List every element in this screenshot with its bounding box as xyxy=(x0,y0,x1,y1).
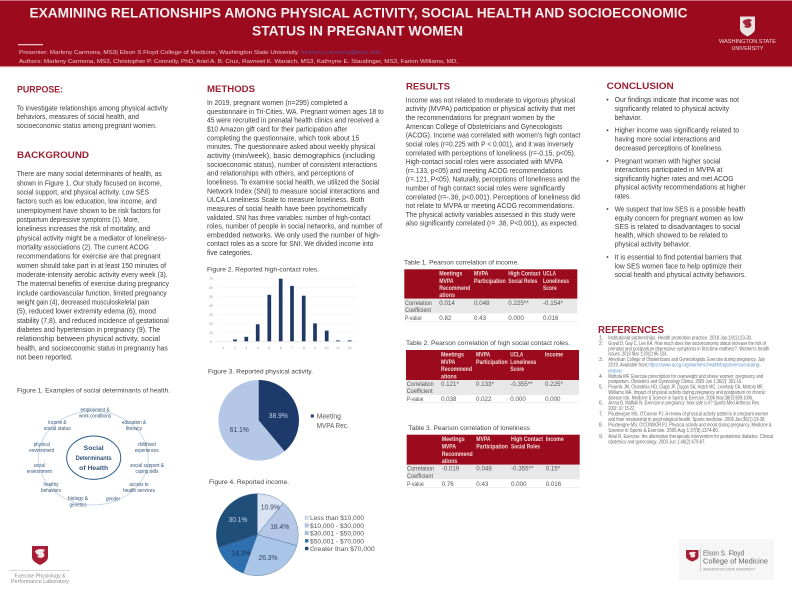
table 1: income: Correlation xyxy=(405,300,432,307)
heading: methods: METHODS xyxy=(207,84,255,94)
table 2: high social contact roles: Income xyxy=(545,352,563,358)
panel: methods: In 2019, pregnant women (n=295) completed a xyxy=(207,98,349,107)
panel: conclusion: It is essential to find potential barriers that xyxy=(615,252,742,261)
table 3: loneliness: P-value xyxy=(407,481,424,488)
panel: conclusion: significantly related to physical activity xyxy=(615,104,729,113)
legend: income categories: $30,001 - $50,000 xyxy=(310,531,364,538)
table 2: high social contact roles: Coefficient xyxy=(407,388,433,395)
legend: income categories: $10,000 - $30,000 xyxy=(310,523,364,530)
diagram: social determinants of health: income & xyxy=(48,420,67,426)
diagram: social determinants of health xyxy=(27,408,164,508)
diagram: social determinants of health: experiences xyxy=(135,448,159,454)
table 3: loneliness: Coefficient xyxy=(407,473,433,480)
table 1: income: 0.048 xyxy=(474,300,490,307)
panel: results: (ACOG). Income was correlated with women's high contact xyxy=(406,131,580,140)
panel: background: moderate-intensity aerobic activity every week (3). xyxy=(17,270,168,279)
figure 4 caption: Figure 4. Reported income. xyxy=(209,479,289,486)
table 1: income: 0.43 xyxy=(474,315,487,322)
panel: methods: ULCA Loneliness Scale to measure loneliness. Both xyxy=(207,195,364,204)
diagram: social determinants of health: genetics xyxy=(70,502,87,508)
panel: background: social support, and physical activity. Low SES xyxy=(17,187,149,196)
bar chart: high-contact roles: 10 xyxy=(209,331,213,335)
table 2: high social contact roles: Recommend xyxy=(441,366,472,373)
panel: references: Institutional partnerships. Health promotion practice. 2018 Jan;19(1):23-30. xyxy=(608,335,752,341)
table 3 caption: Table 3. Pearson correlation of loneliness xyxy=(408,425,531,432)
presenter line xyxy=(19,50,381,56)
table 1: income: Recommend xyxy=(439,285,470,292)
pie chart: income: 18.4% xyxy=(270,524,289,531)
panel: references: and their relationship to psychological health. Sports medicine. 2006 Jan;36(1):19-38. xyxy=(608,417,766,423)
panel: purpose xyxy=(17,84,168,130)
panel: purpose: To investigate relationships among physical activity xyxy=(17,103,168,112)
panel: results: also significantly correlated (r= .38, P<0.001), as expected. xyxy=(406,219,578,228)
panel: background: shown in Figure 1. Our study focused on income, xyxy=(17,178,162,187)
panel: references xyxy=(598,325,773,445)
panel: background: mortality associations (2). The current ACOG xyxy=(17,242,149,252)
bar chart: high-contact roles: 50 xyxy=(209,295,213,299)
bar chart: high-contact roles: 70 xyxy=(209,277,213,281)
panel: background xyxy=(16,150,169,362)
heading: conclusion: CONCLUSION xyxy=(607,81,674,91)
logo: exercise physiology and performance laboratory xyxy=(9,546,70,585)
panel: conclusion: health, which showed to be related to xyxy=(615,231,728,240)
legend: income categories: Less than $10,000 xyxy=(310,515,364,522)
WSU logo: WASHINGTON STATE xyxy=(719,39,777,45)
logo: exercise physiology and performance laboratory: Performance Laboratory xyxy=(11,579,69,585)
panel: references: Mottola MF. Exercise prescription for overweight and obese women: pregnancy and xyxy=(608,374,763,380)
panel: background: unemployment have shown to be risk factors for xyxy=(17,206,161,215)
panel: conclusion: behavior. xyxy=(615,113,642,122)
heading: results: RESULTS xyxy=(406,81,450,91)
table 1: income: Score xyxy=(543,285,557,292)
table 2: high social contact roles: 0.121* xyxy=(441,381,459,388)
panel: background: There are many social determinants of health, as xyxy=(17,169,162,178)
authors line: Authors: Marleny Carmona, MS3, Christopher P. Connolly, PhD, Ariel A. B. Cruz, Ravneet K. Waraich, MS3, Kathryne E. Staudinger, MS3, Farion Williams, MD, xyxy=(19,59,459,65)
table 2: high social contact roles: Correlation xyxy=(407,381,434,388)
diagram: social determinants of health: of Health xyxy=(79,465,108,472)
panel: methods: 45 were recruited in prenatal health clinics and received a xyxy=(207,116,380,125)
diagram: social determinants of health: gender xyxy=(106,496,120,502)
table 2: high social contact roles: P-value xyxy=(407,396,424,403)
diagram: social determinants of health: work conditions xyxy=(79,414,111,420)
panel: methods xyxy=(207,84,384,257)
pie chart: income: 10.9% xyxy=(261,504,280,512)
panel: background: physical activity might be a mediator of loneliness- xyxy=(17,233,167,242)
diagram: social determinants of health: social support & xyxy=(130,463,164,469)
panel: references: 9. xyxy=(599,434,603,440)
table 2: high social contact roles: 0.022 xyxy=(476,396,492,403)
panel: methods: activity (min/week), basic demographics (including xyxy=(207,151,375,160)
table 3: loneliness: MVPA xyxy=(442,444,456,450)
panel: background: not been reported. xyxy=(17,352,73,362)
title: STATUS IN PREGNANT WOMEN xyxy=(252,23,463,39)
bar chart: high-contact roles xyxy=(209,277,355,350)
table 2: high social contact roles: ations xyxy=(441,374,457,380)
table 2: high social contact roles: 0.038 xyxy=(441,396,457,403)
table 3: loneliness: 0.048 xyxy=(476,466,492,472)
table 1: income: UCLA xyxy=(543,270,556,278)
diagram: social determinants of health: environment xyxy=(27,469,52,475)
table 3: loneliness: 0.43 xyxy=(476,481,489,488)
panel: methods: validated. SNI has three variables: number of high-contact xyxy=(207,213,370,222)
panel: methods: and relationships with others, and perceptions of xyxy=(207,169,355,178)
panel: background: recommendations for exercise are that pregnant xyxy=(17,252,161,261)
table 1: income: 0.000 xyxy=(508,315,524,322)
panel: results: American College of Obstetricians and Gynecologists xyxy=(406,122,563,131)
panel: purpose: socioeconomic status among pregnant women. xyxy=(17,121,157,130)
table 3: loneliness: 0.000 xyxy=(511,481,527,488)
bar chart: high-contact roles: 9 xyxy=(314,346,316,350)
panel: references: Science in Sports & Exercise. 2005 Aug 1;37(8):1374-80. xyxy=(608,428,719,434)
panel: background: weight gain (4), decreased musculoskeletal pain xyxy=(16,298,149,306)
panel: conclusion: physical activity behavior. xyxy=(615,240,691,249)
legend: income categories: Greater than $70,000 xyxy=(310,546,375,553)
panel: references: Arena B, Maffulli N. Exercise in pregnancy: how safe is it? Sports Med Arthrosc Rev. xyxy=(608,401,760,407)
diagram: social determinants of health: environment xyxy=(29,448,55,454)
panel: results: correlated with perceptions of loneliness (r=-0.15, p<05). xyxy=(406,148,576,157)
table 2 caption: Table 2. Pearson correlation of high social contact roles. xyxy=(406,340,570,347)
panel: references: obstetrics and gynecology. 2003 Jun 1;46(2):479-87. xyxy=(608,439,706,445)
figure 1 caption: Figure 1. Examples of social determinants of health. xyxy=(17,387,170,394)
presenter line: marleny.carmona@wsu.edu xyxy=(301,50,381,56)
figure 3 caption: Figure 3. Reported physical activity. xyxy=(208,369,313,376)
panel: methods: contact roles as a score for SNI. We divided income into xyxy=(207,239,373,248)
pie chart: income: 30.1% xyxy=(228,517,248,524)
legend: income categories xyxy=(305,515,375,553)
diagram: social determinants of health: health services xyxy=(123,488,155,494)
title xyxy=(30,5,688,39)
pie chart: income: 26.3% xyxy=(258,555,278,562)
table 3: loneliness: Meetings xyxy=(442,436,465,443)
diagram: social determinants of health: social status xyxy=(44,426,71,432)
logo: exercise physiology and performance laboratory: Exercise Physiology & xyxy=(14,574,66,580)
panel: results: Income was not related to moderate to vigorous physical xyxy=(406,95,575,104)
bar chart: high-contact roles: 11 xyxy=(336,346,340,350)
panel: references: 8. xyxy=(599,423,603,429)
panel: background: factors such as low education, low income, and xyxy=(17,197,157,206)
table 2: high social contact roles: 0.133* xyxy=(476,381,494,388)
panel: conclusion: SES is related to disadvantages to social xyxy=(615,222,741,231)
table 1: income: High Contact xyxy=(508,270,540,278)
table 3: loneliness: Recommend xyxy=(442,451,473,458)
legend: meeting MVPA rec xyxy=(311,414,349,430)
table 1: income: Loneliness xyxy=(543,278,569,285)
header banner xyxy=(0,0,792,67)
bar chart: high-contact roles: 60 xyxy=(209,286,213,290)
panel: references: 4. xyxy=(599,374,603,380)
panel: conclusion: social health and physical activity behaviors. xyxy=(615,270,746,279)
bar chart: high-contact roles: 20 xyxy=(209,322,213,326)
bar chart: high-contact roles: 8 xyxy=(303,346,305,350)
bar chart: high-contact roles: 5 xyxy=(268,346,270,350)
WSU logo xyxy=(719,16,777,52)
pie chart: physical activity: 61.1% xyxy=(230,427,249,434)
panel: background: The maternal benefits of exercise during pregnancy xyxy=(17,279,169,288)
table 2: high social contact roles: MVPA xyxy=(476,352,491,358)
diagram: social determinants of health: access to xyxy=(130,482,149,488)
panel: methods: socioeconomic status), number of consistent interactions xyxy=(207,160,377,169)
table 3: loneliness: High Contact xyxy=(511,436,543,443)
panel: results xyxy=(406,81,580,228)
bar chart: high-contact roles: 40 xyxy=(209,304,213,308)
table 2: high social contact roles xyxy=(406,350,579,403)
panel: references: postpartum. Obstetrics and Gynecology Clinics. 2009 Jun 1;36(2): 301-16. xyxy=(608,379,742,385)
bar chart: high-contact roles: 4 xyxy=(257,346,259,350)
panel: conclusion: Higher income was significantly related to xyxy=(615,126,739,135)
diagram: social determinants of health: healthy xyxy=(44,482,59,488)
table 2: high social contact roles: UCLA xyxy=(510,352,524,358)
heading: references: REFERENCES xyxy=(598,325,664,336)
bar chart: high-contact roles: 2 xyxy=(234,346,236,350)
panel: methods: completing the questionnaire, which took about 15 xyxy=(207,133,359,142)
table 3: loneliness: Correlation xyxy=(407,466,434,472)
panel: conclusion: Pregnant women with higher social xyxy=(615,156,721,165)
panel: conclusion: decreased perceptions of loneliness. xyxy=(615,143,723,152)
panel: background: women should take part in at least 150 minutes of xyxy=(16,261,167,270)
table 2: high social contact roles: Meetings xyxy=(441,352,464,358)
table 1 caption: Table 1. Pearson correlation of income. xyxy=(404,259,519,266)
panel: methods: minutes. The questionnaire asked about weekly physical xyxy=(207,142,375,151)
diagram: social determinants of health: social xyxy=(34,463,45,469)
panel: background: health, and socioeconomic status in pregnancy has xyxy=(17,343,168,352)
table 3: loneliness: -0.355** xyxy=(511,466,534,472)
title: EXAMINING RELATIONSHIPS AMONG PHYSICAL ACTIVITY, SOCIAL HEALTH AND SOCIOECONOMIC xyxy=(30,5,688,21)
panel: references: 6. xyxy=(599,401,603,407)
panel: background: loneliness increases the risk of mortality, and xyxy=(17,224,150,233)
panel: background: (5), reduced lower extremity edema (6), mood xyxy=(17,307,156,316)
diagram: social determinants of health: Determinants xyxy=(76,455,112,462)
table 1: income: 0.014 xyxy=(439,300,455,307)
panel: references: 1. xyxy=(599,335,603,341)
diagram: social determinants of health: employment & xyxy=(80,408,110,414)
panel: methods: loneliness. To examine social health, we utilized the Social xyxy=(207,178,380,186)
panel: references: 2002; 10: 15-22. xyxy=(608,406,635,412)
panel: background: include cardiovascular function, limited pregnancy xyxy=(17,288,167,297)
heading: purpose: PURPOSE: xyxy=(17,84,63,94)
table 1: income xyxy=(404,269,577,322)
panel: methods: questionnaire in Tri-Cities, WA. Pregnant women ages 18 to xyxy=(207,107,384,116)
bar chart: high-contact roles: 3 xyxy=(245,346,247,350)
diagram: social determinants of health: behaviors xyxy=(41,488,61,494)
heading: background: BACKGROUND xyxy=(17,150,90,160)
panel: results: not relate to MVPA or meeting ACOG recommendations. xyxy=(406,201,574,210)
bar chart: high-contact roles: 30 xyxy=(209,313,213,317)
panel: results: (r=.121, P<05). Naturally, perceptions of loneliness and the xyxy=(406,175,580,184)
table 1: income: P-value xyxy=(405,315,422,322)
panel: results: number of high contact social roles were significantly xyxy=(406,184,565,192)
panel: results: (r=.133, p<05) and meeting ACOG recommendations xyxy=(406,166,563,175)
table 3: loneliness: 0.016 xyxy=(546,481,562,488)
panel: references: issues. 2010 Mar 1;20(2):96-104. xyxy=(608,352,668,358)
pie chart: physical activity: 38.9% xyxy=(269,413,288,420)
legend: meeting MVPA rec: MVPA Rec. xyxy=(317,423,349,430)
bar chart: high-contact roles: 0 xyxy=(210,340,212,344)
table 1: income: Coefficient xyxy=(405,307,431,314)
logo: Elson S. Floyd College of Medicine: Elson S. Floyd xyxy=(703,548,744,558)
table 2: high social contact roles: 0.000 xyxy=(545,396,561,403)
panel: methods: roles, number of people in social networks, and number of xyxy=(207,222,383,231)
panel: background: postpartum depressive symptoms (1). More, xyxy=(17,215,139,224)
panel: conclusion: We suspect that low SES is a possible health xyxy=(615,204,745,213)
bar chart: high-contact roles: 6 xyxy=(280,346,282,350)
bar chart: high-contact roles: 12 xyxy=(348,346,352,350)
panel: conclusion: having more social interactions and xyxy=(615,135,720,144)
table 2: high social contact roles: 0.000 xyxy=(510,396,526,403)
panel: results: social roles (r=0.225 with P < 0.001), and it was inversely xyxy=(406,140,574,148)
panel: conclusion: equity concern for pregnant women as low xyxy=(615,213,744,222)
panel: methods: five categories. xyxy=(207,248,252,257)
panel: conclusion: low SES women face to help optimize their xyxy=(615,261,742,270)
table 3: loneliness: 0.76 xyxy=(442,481,454,488)
table 3: loneliness: Participation xyxy=(476,444,508,450)
logo: Elson S. Floyd College of Medicine: College of Medicine xyxy=(703,556,768,566)
panel: methods: measures of social health have been psychometrically xyxy=(207,204,367,213)
table 2: high social contact roles: Score xyxy=(510,366,524,373)
diagram: social determinants of health: Social xyxy=(84,445,104,452)
pie chart: income: 14.3% xyxy=(232,550,250,558)
table 1: income: ations xyxy=(439,292,455,299)
panel: references: https://www.acog.org/womens-health/faqs/exercise-during- xyxy=(648,362,761,368)
table 3: loneliness: 0.15* xyxy=(546,466,561,472)
table 1: income: MVPA xyxy=(439,278,454,285)
panel: background: diabetes and hypertension in pregnancy (9). The xyxy=(17,325,160,334)
panel: references: 2. xyxy=(599,341,603,347)
table 1: income: 0.225** xyxy=(508,300,529,307)
table 1: income: 0.82 xyxy=(439,315,452,322)
panel: conclusion xyxy=(607,81,746,279)
pie chart: physical activity xyxy=(218,380,349,461)
panel: methods: embedded networks. We only used the number of high- xyxy=(207,230,381,239)
bar chart: high-contact roles: 10 xyxy=(325,346,329,350)
panel: conclusion: rates. xyxy=(615,192,631,201)
table 3: loneliness: MVPA xyxy=(476,436,491,443)
panel: references: pregnancy xyxy=(608,369,623,375)
legend: income categories: $50,001 - $70,000 xyxy=(310,538,364,545)
panel: conclusion: physical activity recommendations at higher xyxy=(615,183,746,192)
panel: purpose: behaviors, measures of social health, and xyxy=(17,112,139,121)
table 1: income: -0.154* xyxy=(543,300,564,307)
panel: references: 5. xyxy=(599,385,603,391)
table 1: income: MVPA xyxy=(474,270,489,278)
table 2: high social contact roles: Loneliness xyxy=(510,359,537,366)
panel: references: Williams MA. Impact of physical activity during pregnancy and postpartum on chronic xyxy=(608,390,766,396)
panel: references: 2019. Available from: xyxy=(608,362,648,368)
table 2: high social contact roles: Participation xyxy=(476,359,508,366)
panel: references: disease risk. Medicine & Science in Sports & Exercise. 2006 May;38(5):989-1006. xyxy=(608,395,753,401)
panel: results: activity (MVPA) participation or physical activity that met xyxy=(406,104,575,113)
diagram: social determinants of health: education & xyxy=(122,420,146,426)
table 1: income: 0.016 xyxy=(543,315,559,322)
presenter line: Presenter: Marleny Carmona, MS3| Elson S Floyd College of Medicine, Washington State University xyxy=(19,50,298,56)
bar chart: high-contact roles: 1 xyxy=(222,346,224,350)
panel: conclusion: interactions participated in MVPA at xyxy=(615,165,722,174)
bar chart: high-contact roles: 7 xyxy=(291,346,293,350)
WSU logo: UNIVERSITY xyxy=(732,46,764,52)
table 2: high social contact roles: -0.355** xyxy=(510,381,533,388)
diagram: social determinants of health: literacy xyxy=(126,426,142,432)
logo: Elson S. Floyd College of Medicine xyxy=(679,539,774,580)
table 3: loneliness xyxy=(407,435,580,488)
table 1: income: Participation xyxy=(474,278,506,285)
panel: results: High-contact social roles were associated with MVPA xyxy=(406,157,563,166)
diagram: social determinants of health: childhood xyxy=(138,442,156,448)
table 3: loneliness: Social Roles xyxy=(511,444,540,450)
panel: background: relationship between physical activity, social xyxy=(17,334,160,343)
panel: references: 7. xyxy=(599,412,603,418)
legend: meeting MVPA rec: Meeting xyxy=(317,414,341,420)
panel: conclusion: Our findings indicate that income was not xyxy=(615,95,739,104)
panel: results: the recommendations for pregnant women by the xyxy=(406,113,555,122)
table 3: loneliness: Income xyxy=(546,436,564,443)
panel: methods: $10 Amazon gift card for their participation after xyxy=(207,125,348,134)
table 2: high social contact roles: 0.225* xyxy=(545,381,563,388)
diagram: social determinants of health: physical xyxy=(34,442,50,448)
diagram: social determinants of health: coping skills xyxy=(136,469,159,475)
table 3: loneliness: ations xyxy=(442,458,458,465)
table 1: income: Social Roles xyxy=(508,278,538,285)
panel: background: stability (7,8), and reduced incidence of gestational xyxy=(17,316,169,325)
panel: references: 3. xyxy=(599,357,603,363)
diagram: social determinants of health: biology & xyxy=(68,496,89,502)
table 3: loneliness: -0.019 xyxy=(442,466,460,472)
logo: Elson S. Floyd College of Medicine: WASHINGTON STATE UNIVERSITY xyxy=(703,568,756,572)
table 1: income: Meetings xyxy=(439,270,463,278)
pie chart: income xyxy=(216,494,375,576)
panel: methods: Network Index (SNI) to measure social interactions and xyxy=(207,186,379,195)
table 2: high social contact roles: MVPA xyxy=(441,359,456,366)
panel: results: correlated (r=-.36, p<0.001). Perceptions of loneliness did xyxy=(406,192,580,201)
panel: results: The physical activity variables assessed in this study were xyxy=(406,210,575,219)
figure 2 caption: Figure 2. Reported high-contact roles. xyxy=(207,267,319,274)
panel: conclusion: significantly higher rates and met ACOG xyxy=(615,174,734,183)
